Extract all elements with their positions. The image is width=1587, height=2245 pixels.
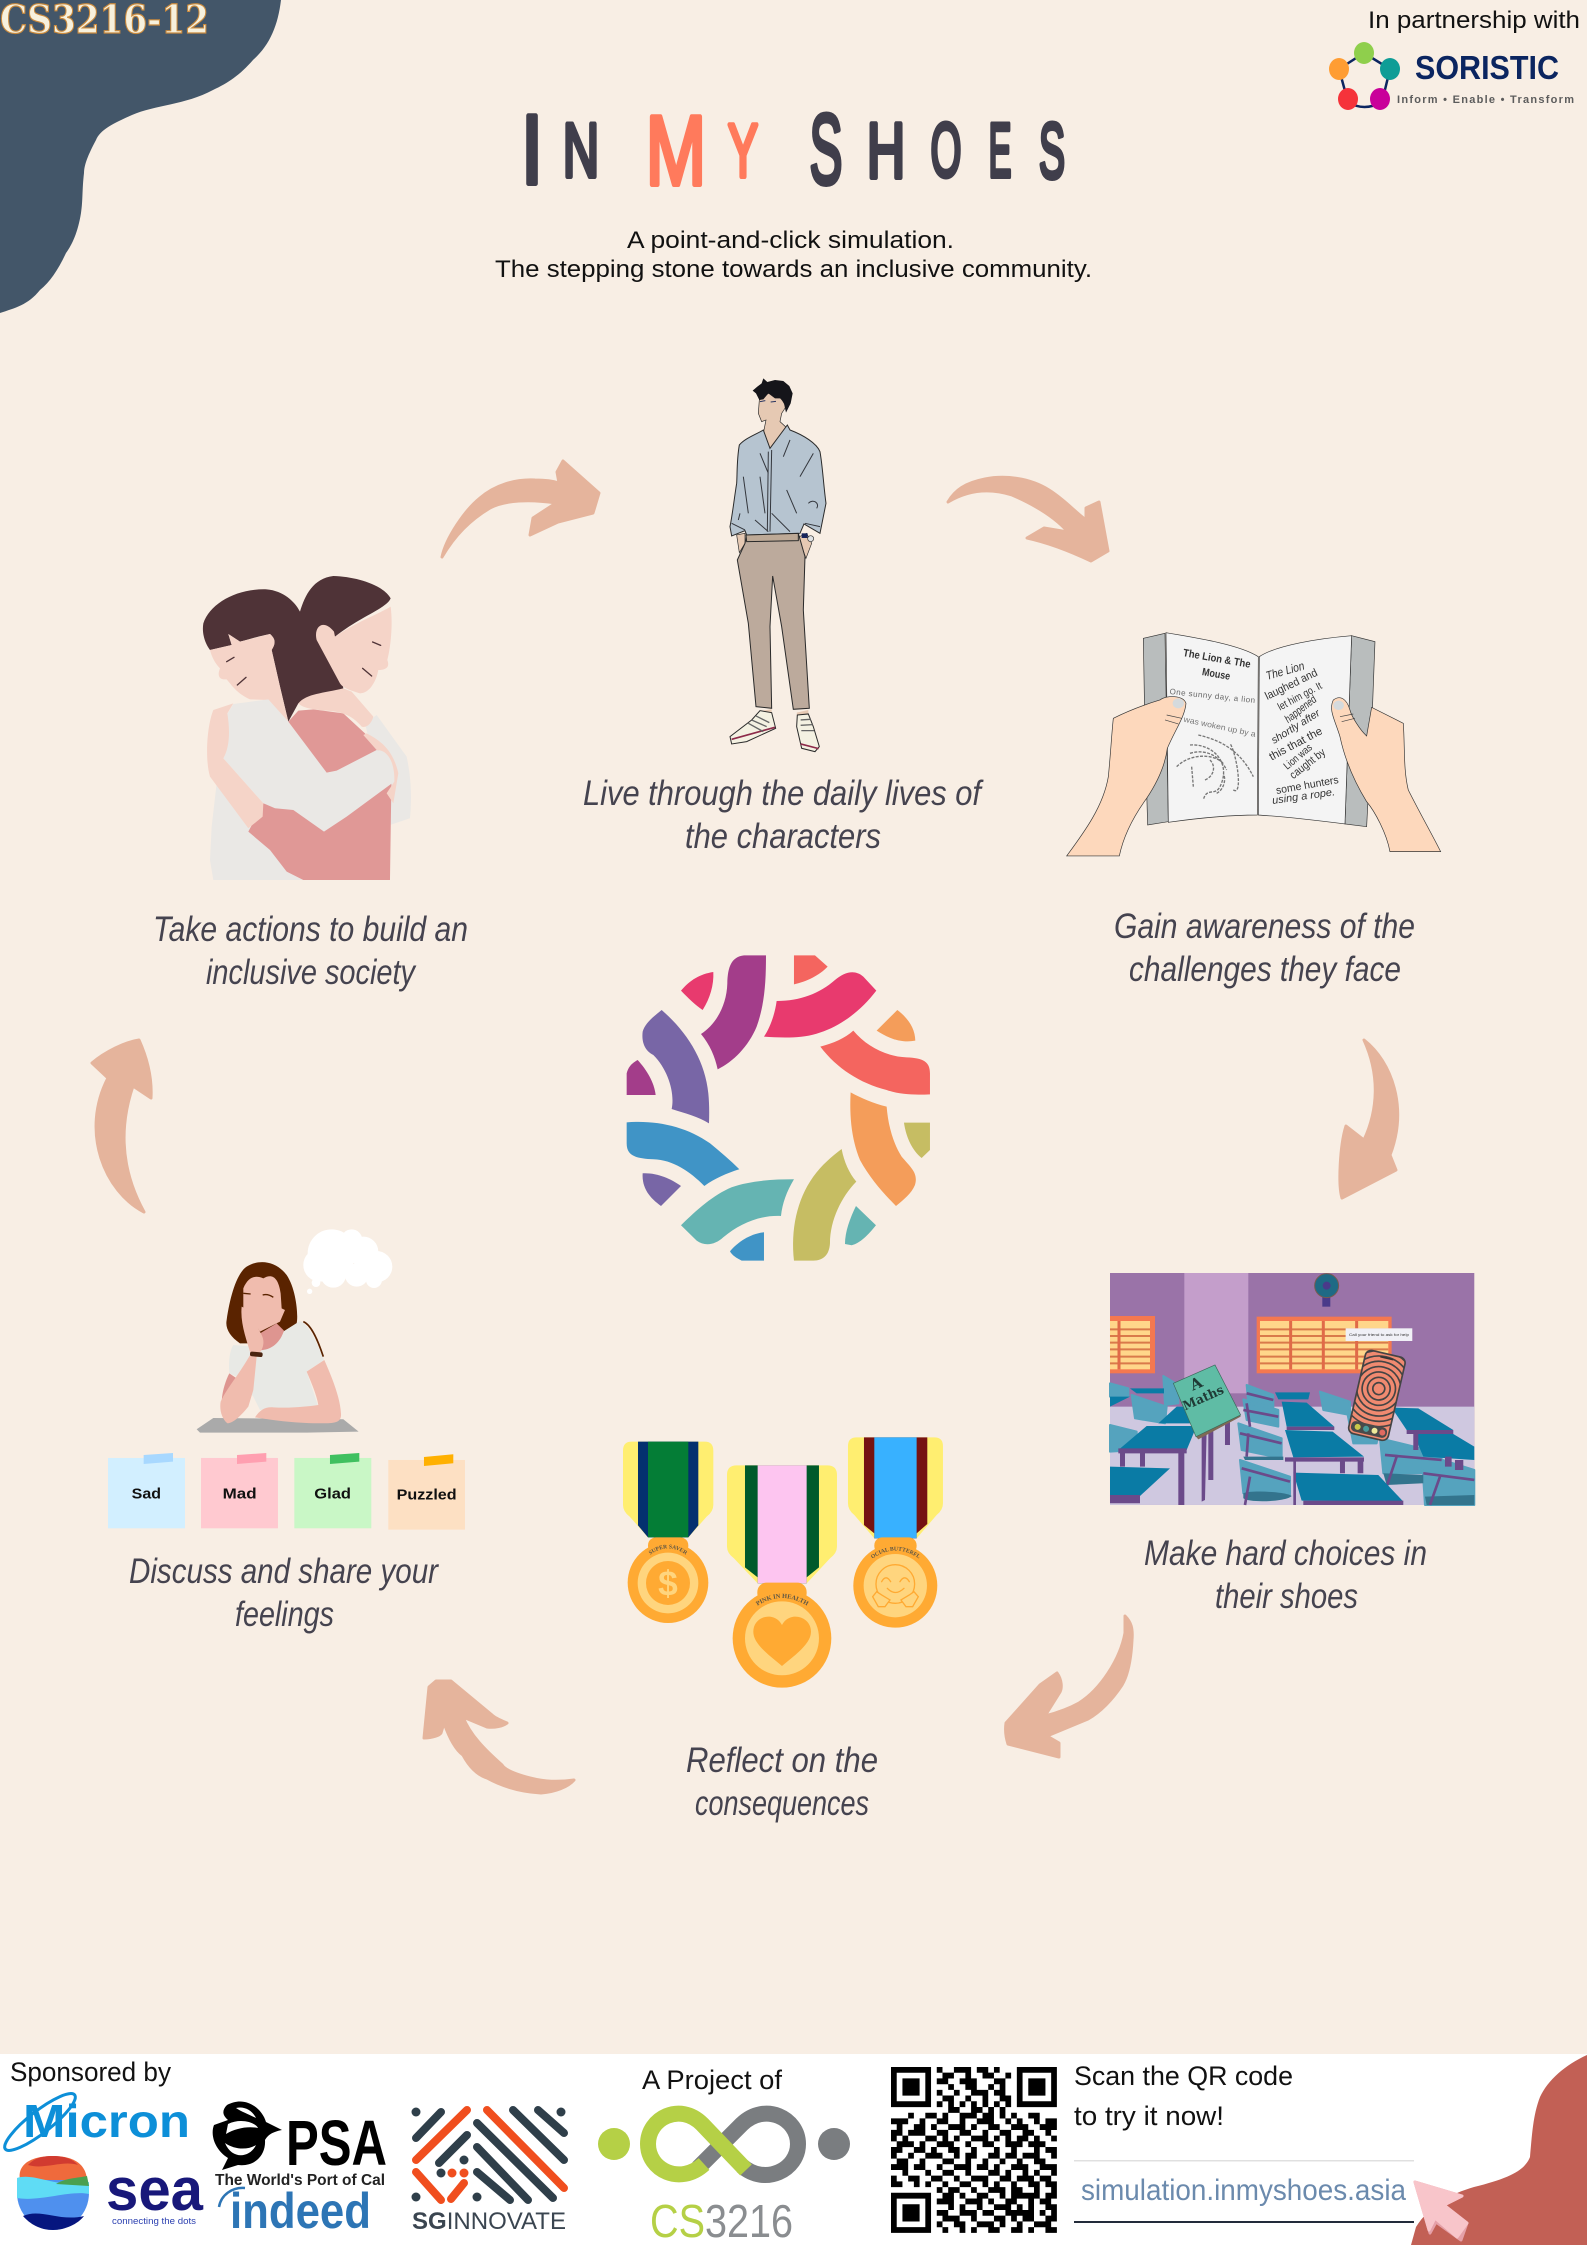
sticky note: puzzled: [388, 1454, 465, 1530]
book page text: [1169, 647, 1340, 807]
link box with URL: simulation.inmyshoes.asia: [1081, 2174, 1406, 2207]
logo: PSA: [213, 2101, 387, 2189]
logo: SGInnovate: [412, 2108, 566, 2235]
call to action text: [1074, 2061, 1293, 2131]
caption: consequences: consequences: [695, 1784, 869, 1823]
title: H: [867, 109, 905, 195]
shirt: [229, 1321, 324, 1410]
arms: [220, 1307, 263, 1423]
wall fan: [1315, 1274, 1339, 1307]
subtitle: The stepping stone towards an inclusive community.: [495, 256, 1092, 283]
title: M: [646, 97, 706, 206]
caption: actions: [153, 910, 468, 992]
illustration: hugging friends: [203, 576, 411, 880]
icon: cursor pointer: [1415, 2182, 1467, 2240]
arrow: consequences to feelings: [424, 1681, 574, 1793]
hair back: [226, 1262, 297, 1343]
corner blob: top left: [0, 0, 281, 313]
tooltip: Call your friend to ask for help: [1349, 1332, 1410, 1337]
caption: awareness: [1114, 907, 1415, 989]
book page text: Mouse: [1201, 666, 1231, 683]
title: S: [809, 94, 843, 205]
tooltip: [1346, 1328, 1412, 1341]
call to action text: Scan the QR code: [1074, 2061, 1293, 2091]
arrow: awareness to choices: [1340, 1040, 1398, 1198]
subtitle: A point-and-click simulation.: [627, 227, 954, 254]
footer band: [0, 2054, 1587, 2245]
windows: [1110, 1316, 1392, 1373]
logo: Indeed: indeed: [230, 2183, 371, 2239]
caption: daily lives: [583, 774, 984, 856]
logo: PSA: The World's Port of Cal: [215, 2172, 385, 2189]
maths textbook: [1173, 1365, 1241, 1439]
caption: awareness: challenges they face: [1129, 950, 1401, 989]
logo: PSA: PSA: [286, 2107, 387, 2179]
logo: Soristic: Inform • Enable • Transform: [1397, 94, 1574, 106]
book page text: The Lion & The: [1182, 647, 1252, 671]
logo: Micron: [0, 2086, 190, 2158]
title: N: [563, 108, 599, 193]
caption: consequences: Reflect on the: [686, 1741, 878, 1780]
book page text: One sunny day, a lion: [1169, 687, 1256, 705]
caption: feelings: [129, 1552, 439, 1634]
project of label: A Project of: [642, 2065, 782, 2095]
corner blob: bottom right: [1411, 2055, 1587, 2245]
caption: actions: Take actions to build an: [153, 910, 468, 949]
medal: pink in health: PINK IN HEALTH: [756, 1594, 809, 1606]
illustration: classroom game scene: [1110, 1273, 1474, 1505]
book page text: shortly after: [1269, 707, 1323, 747]
call to action text: to try it now!: [1074, 2101, 1224, 2131]
sticky note: mad: [201, 1453, 278, 1528]
caption: feelings: feelings: [235, 1595, 334, 1634]
medal: pink in health: [727, 1465, 837, 1688]
sticky note: sad: Sad: [132, 1486, 161, 1502]
title: I: [521, 95, 543, 204]
left hand: [1067, 697, 1186, 856]
arrow: feelings to actions: [92, 1040, 151, 1212]
thought cloud: [303, 1229, 392, 1294]
caption: actions: inclusive society: [206, 953, 417, 992]
book page text: The Lion: [1264, 659, 1306, 683]
title: [521, 94, 1065, 206]
medal: super saver: [623, 1442, 714, 1623]
arrow: daily lives to awareness: [948, 477, 1108, 561]
medal: super saver: SUPER SAVER: [648, 1544, 687, 1555]
book page text: caught by: [1288, 746, 1328, 782]
arrow: actions to daily lives: [442, 461, 599, 557]
caption: hard choices: their shoes: [1215, 1577, 1358, 1616]
phone: [1348, 1350, 1406, 1442]
book page text: this that the: [1267, 725, 1325, 763]
sponsored by label: Sponsored by: [10, 2057, 171, 2087]
sticky note: glad: [294, 1453, 371, 1528]
book page text: Lion was: [1282, 742, 1315, 772]
logo: Sea: [17, 2156, 204, 2230]
illustration: hands holding book: [1067, 633, 1441, 856]
medals: [623, 1437, 943, 1688]
logo: Soristic: SORISTIC: [1415, 49, 1559, 86]
sticky note: puzzled: Puzzled: [397, 1487, 457, 1503]
caption: hard choices: [1144, 1534, 1427, 1616]
caption: daily lives: Live through the daily lives of: [583, 774, 984, 813]
face: [243, 1276, 285, 1332]
arrow: choices to consequences: [1006, 1616, 1132, 1757]
logo: Micron: Micron: [23, 2095, 190, 2147]
book page text: laughed and: [1263, 667, 1320, 703]
caption: consequences: [686, 1741, 878, 1823]
logo: Sea: connecting the dots: [112, 2216, 197, 2226]
sticky note: mad: Mad: [223, 1486, 257, 1502]
caption: hard choices: Make hard choices in: [1144, 1534, 1427, 1573]
caption: daily lives: the characters: [685, 817, 881, 856]
logo: Sea: sea: [106, 2156, 204, 2223]
sticky note: glad: Glad: [314, 1486, 351, 1502]
table: [197, 1418, 359, 1433]
QR code: [891, 2070, 1057, 2230]
book page text: happened: [1283, 693, 1319, 726]
partnership note: In partnership with: [1368, 7, 1580, 34]
medal: super saver: $: [658, 1565, 678, 1604]
title: O: [931, 107, 961, 193]
desks: [1110, 1388, 1474, 1502]
book page text: let him go. It: [1276, 680, 1324, 713]
medal: social butterfly: SOCIAL BUTTERFLY: [871, 1546, 920, 1558]
caption: awareness: Gain awareness of the: [1114, 907, 1415, 946]
medal: social butterfly: [848, 1437, 943, 1628]
logo: CS3216: [598, 2114, 850, 2245]
central logo: colourful woven ring: [627, 955, 930, 1261]
maths textbook: A: [1186, 1373, 1206, 1395]
book page text: was woken up by a: [1182, 715, 1257, 739]
logo: Soristic: [1329, 42, 1574, 110]
book page text: some hunters: [1275, 774, 1340, 797]
title: Y: [728, 110, 758, 193]
chairs: [1110, 1376, 1474, 1505]
book page text: using a rope.: [1271, 786, 1336, 807]
logo: SGInnovate: SGINNOVATE: [412, 2208, 566, 2235]
subtitle: [495, 227, 1092, 283]
title: E: [989, 109, 1011, 193]
right hand: [1332, 698, 1441, 852]
figure: young man (daily lives): [730, 378, 826, 752]
illustration: thinking woman with sticky notes: [108, 1229, 465, 1530]
maths textbook: Maths: [1180, 1382, 1226, 1413]
title: S: [1039, 108, 1065, 195]
sticky note: sad: [108, 1453, 185, 1528]
caption: feelings: Discuss and share your: [129, 1552, 439, 1591]
